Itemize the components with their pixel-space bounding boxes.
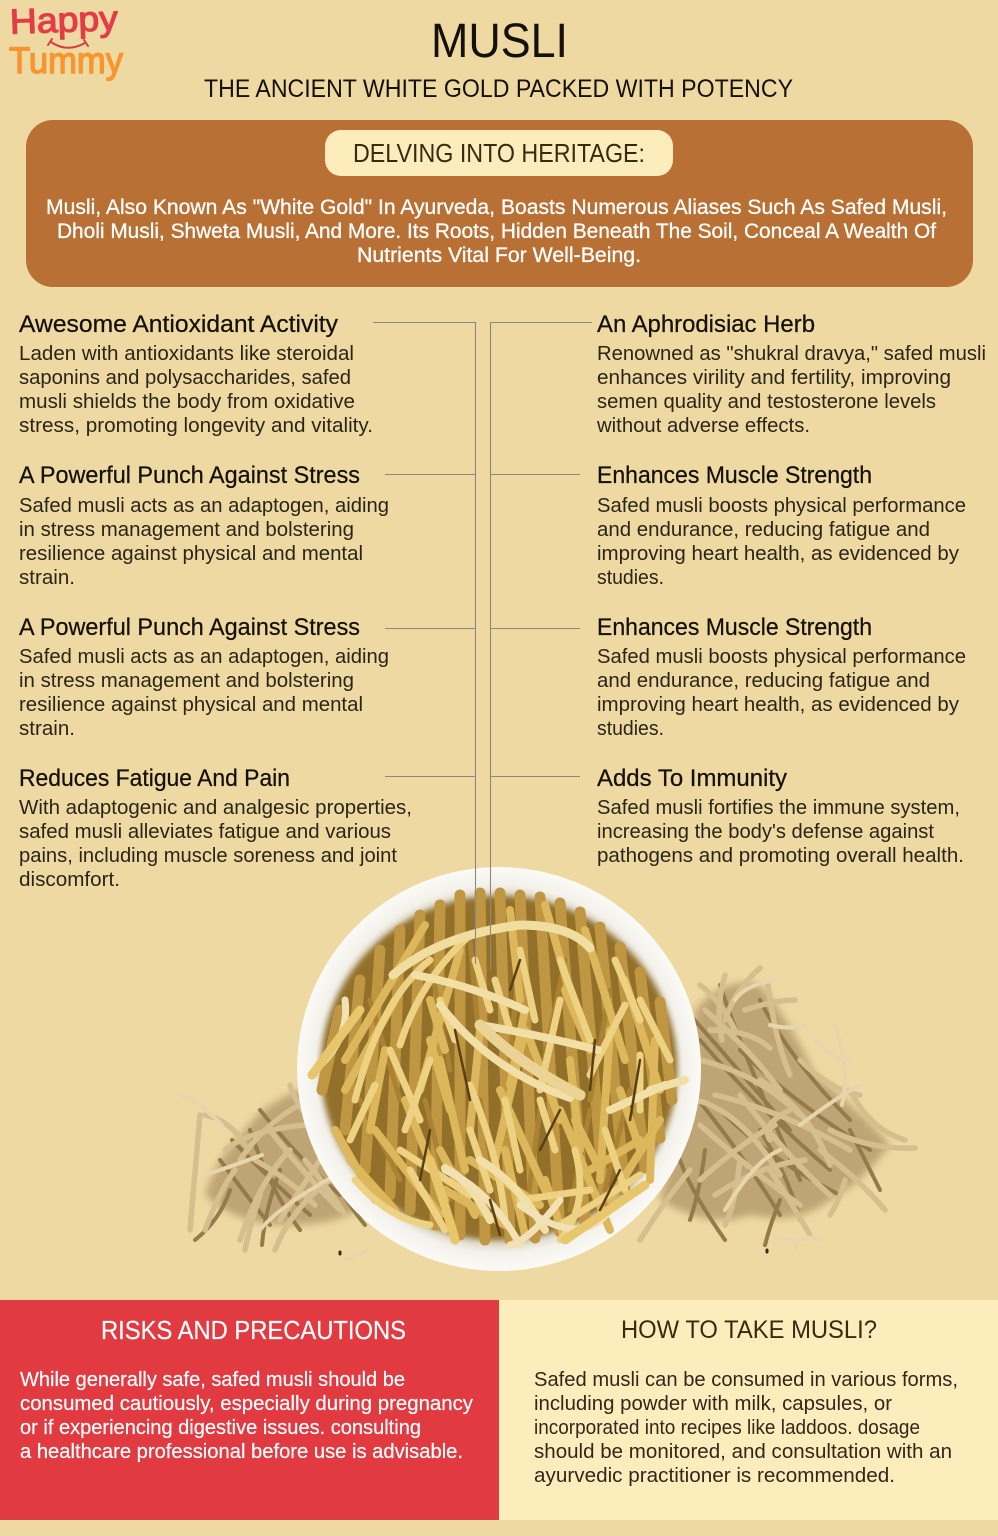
how to take text: should be monitored, and consultation with an	[534, 1440, 952, 1463]
benefit: aphrodisiac: An Aphrodisiac Herb	[597, 311, 815, 338]
logo: Happy Tummy: Tummy	[9, 40, 123, 81]
benefit: stress 2: in stress management and bolstering	[19, 669, 354, 692]
benefit: fatigue and pain: safed musli alleviates fatigue and various	[19, 820, 391, 843]
risks text: While generally safe, safed musli should be	[20, 1368, 405, 1391]
illustration: root piles beside the bowl	[180, 968, 915, 1260]
benefit: stress 2: strain.	[19, 717, 75, 740]
benefit: fatigue and pain	[19, 765, 412, 891]
heritage text: Dholi Musli, Shweta Musli, And More. Its Roots, Hidden Beneath The Soil, Conceal A Wealth Of	[57, 220, 936, 243]
benefit: immunity: increasing the body's defense against	[597, 820, 934, 843]
risks text: or if experiencing digestive issues. consulting	[20, 1416, 421, 1439]
benefit: stress 2: resilience against physical and mental	[19, 693, 363, 716]
benefit: muscle strength 1: Enhances Muscle Strength	[597, 462, 872, 489]
benefit: stress 2: A Powerful Punch Against Stress	[19, 614, 360, 641]
panel: how to take musli	[499, 1300, 998, 1520]
heritage text	[46, 196, 947, 267]
how to take heading: HOW TO TAKE MUSLI?	[621, 1316, 877, 1344]
benefit: stress 1: resilience against physical and mental	[19, 542, 363, 565]
benefit: fatigue and pain: With adaptogenic and analgesic properties,	[19, 796, 412, 819]
how to take text: Safed musli can be consumed in various forms,	[534, 1368, 958, 1391]
benefit: antioxidant: saponins and polysaccharides, safed	[19, 366, 351, 389]
heritage text: Nutrients Vital For Well-Being.	[357, 244, 641, 267]
benefit: muscle strength 2: studies.	[597, 717, 664, 740]
benefit: aphrodisiac: semen quality and testosterone levels	[597, 390, 936, 413]
benefit: aphrodisiac: Renowned as "shukral dravya," safed musli	[597, 342, 986, 365]
benefit: muscle strength 2: and endurance, reducing fatigue and	[597, 669, 930, 692]
heritage text: Musli, Also Known As "White Gold" In Ayurveda, Boasts Numerous Aliases Such As Safed Musli,	[46, 196, 947, 219]
benefit: muscle strength 2: improving heart health, as evidenced by	[597, 693, 960, 716]
benefit: stress 1: in stress management and bolstering	[19, 518, 354, 541]
benefit: muscle strength 1: and endurance, reducing fatigue and	[597, 518, 930, 541]
panel: risks and precautions	[0, 1300, 499, 1520]
benefit: antioxidant	[19, 311, 373, 437]
panel: heritage	[26, 120, 973, 287]
logo: Happy Tummy	[9, 0, 123, 81]
title: MUSLI	[431, 15, 568, 68]
connector lines	[373, 322, 592, 970]
root mass	[312, 893, 685, 1245]
benefit: stress 1: strain.	[19, 566, 75, 589]
risks text: a healthcare professional before use is advisable.	[20, 1440, 463, 1463]
risks heading: RISKS AND PRECAUTIONS	[101, 1315, 406, 1345]
benefit: antioxidant: Laden with antioxidants like steroidal	[19, 342, 354, 365]
benefit: antioxidant: stress, promoting longevity and vitality.	[19, 414, 373, 437]
benefit: immunity	[597, 765, 964, 867]
heritage pill heading: DELVING INTO HERITAGE:	[353, 138, 645, 168]
benefit: immunity: pathogens and promoting overall health.	[597, 844, 964, 867]
how to take text: including powder with milk, capsules, or	[534, 1392, 892, 1415]
benefit: stress 1: A Powerful Punch Against Stress	[19, 462, 360, 489]
benefit: aphrodisiac	[596, 311, 986, 437]
risks text	[20, 1368, 474, 1463]
benefit: immunity: Safed musli fortifies the immune system,	[597, 796, 960, 819]
benefit: fatigue and pain: pains, including muscle soreness and joint	[19, 844, 397, 867]
benefit: muscle strength 2: Enhances Muscle Strength	[597, 614, 872, 641]
benefit: aphrodisiac: enhances virility and fertility, improving	[597, 366, 951, 389]
bowl	[297, 867, 701, 1271]
subtitle: THE ANCIENT WHITE GOLD PACKED WITH POTENCY	[204, 75, 793, 103]
benefit: muscle strength 1	[597, 462, 966, 589]
illustration: white bowl of musli roots	[297, 867, 701, 1271]
benefit: stress 2: Safed musli acts as an adaptogen, aiding	[19, 645, 389, 668]
benefit: stress 1	[19, 462, 389, 589]
benefit: fatigue and pain: Reduces Fatigue And Pain	[19, 765, 290, 792]
how to take text	[534, 1368, 958, 1487]
benefit: muscle strength 1: improving heart health, as evidenced by	[597, 542, 960, 565]
benefit: fatigue and pain: discomfort.	[19, 868, 120, 891]
logo: Happy Tummy: Happy	[9, 0, 119, 42]
benefit: muscle strength 2	[597, 614, 966, 740]
heritage pill heading	[325, 130, 673, 176]
how to take text: incorporated into recipes like laddoos. dosage	[534, 1416, 920, 1439]
benefit: antioxidant: musli shields the body from oxidative	[19, 390, 355, 413]
risks text: consumed cautiously, especially during pregnancy	[20, 1392, 474, 1415]
how to take text: ayurvedic practitioner is recommended.	[534, 1464, 895, 1487]
benefit: immunity: Adds To Immunity	[597, 765, 787, 792]
benefit: antioxidant: Awesome Antioxidant Activity	[19, 311, 338, 338]
benefit: muscle strength 1: Safed musli boosts physical performance	[597, 494, 966, 517]
benefit: stress 2	[19, 614, 389, 740]
benefit: stress 1: Safed musli acts as an adaptogen, aiding	[19, 494, 389, 517]
benefit: muscle strength 2: Safed musli boosts physical performance	[597, 645, 966, 668]
benefit: aphrodisiac: without adverse effects.	[596, 414, 810, 437]
benefit: muscle strength 1: studies.	[597, 566, 664, 589]
